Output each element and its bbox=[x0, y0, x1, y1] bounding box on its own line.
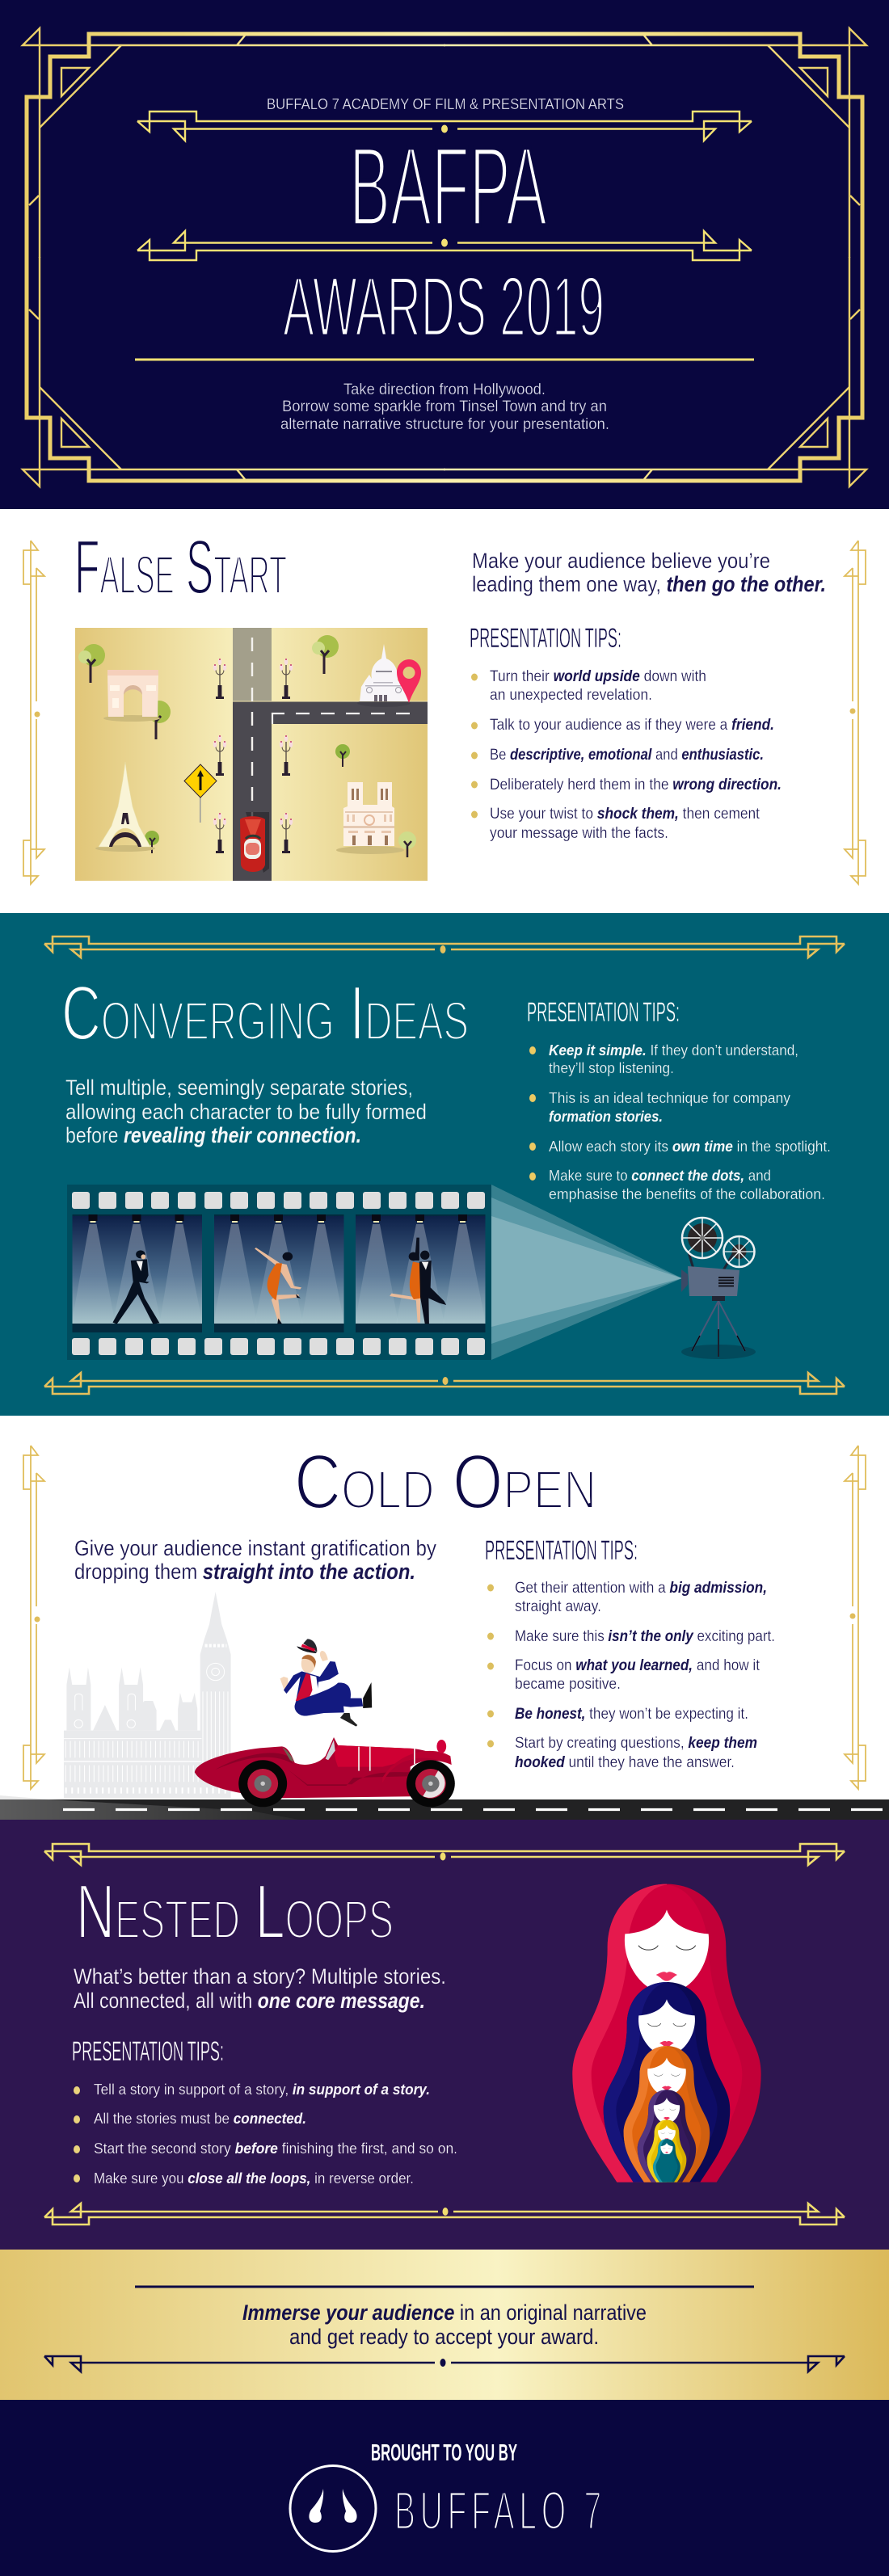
sprocket holes bbox=[72, 1192, 485, 1355]
Arc de Triomphe bbox=[103, 670, 160, 722]
lead text bbox=[74, 1536, 436, 1584]
panel: Converging Ideas bbox=[0, 913, 889, 1416]
Sacre Coeur bbox=[357, 644, 411, 707]
brought to you by: BROUGHT TO YOU BY bbox=[371, 2440, 517, 2466]
map illustration bbox=[75, 628, 428, 881]
location pin bbox=[397, 659, 421, 703]
hat bbox=[297, 1639, 317, 1653]
street lamps bbox=[213, 659, 293, 853]
tips list: an unexpected revelation. bbox=[490, 687, 652, 704]
tips heading: PRESENTATION TIPS: bbox=[470, 623, 621, 654]
lead text bbox=[74, 1964, 446, 2013]
intro text: alternate narrative structure for your presentation. bbox=[280, 416, 609, 433]
tips list: Be descriptive, emotional and enthusiastic. bbox=[490, 747, 764, 764]
panel: footer bbox=[0, 2400, 889, 2576]
Notre Dame bbox=[336, 782, 404, 854]
dancers bbox=[112, 1238, 446, 1324]
panel: header bbox=[0, 0, 889, 509]
lead text: Give your audience instant gratification by bbox=[74, 1536, 436, 1560]
red vintage car bbox=[195, 1737, 455, 1807]
panel: conclusion band bbox=[0, 2250, 889, 2400]
ornament bbox=[44, 2356, 845, 2372]
presentation tips bbox=[72, 2036, 457, 2187]
closing text bbox=[242, 2300, 647, 2349]
couple dancing bbox=[390, 1238, 446, 1324]
film strip bbox=[67, 1185, 491, 1360]
lead text: leading them one way, then go the other. bbox=[472, 572, 826, 596]
lead text: Tell multiple, seemingly separate stories, bbox=[65, 1075, 413, 1100]
tips list: This is an ideal technique for company bbox=[549, 1089, 791, 1106]
Westminster skyline bbox=[64, 1592, 231, 1798]
road bbox=[0, 1795, 889, 1820]
divider bbox=[135, 2285, 754, 2288]
lead text bbox=[472, 549, 826, 596]
tips list: Start by creating questions, keep them bbox=[515, 1735, 757, 1752]
tips list: Keep it simple. If they don’t understand, bbox=[549, 1042, 798, 1059]
lead text: allowing each character to be fully formed bbox=[65, 1100, 427, 1124]
subtitle: Awards 2019: AWARDS 2019 bbox=[283, 260, 605, 354]
tips list: Make sure this isn’t the only exciting part. bbox=[515, 1628, 775, 1645]
Eiffel Tower bbox=[95, 762, 155, 852]
lead text: Make your audience believe you’re bbox=[472, 549, 770, 573]
tips list: Get their attention with a big admission, bbox=[515, 1580, 767, 1597]
tips list bbox=[529, 1042, 831, 1202]
tips list bbox=[74, 2081, 457, 2187]
presentation tips bbox=[485, 1535, 775, 1771]
tips list: Talk to your audience as if they were a friend. bbox=[490, 717, 774, 734]
tips list: became positive. bbox=[515, 1676, 621, 1693]
title: BAFPA: BAFPA bbox=[349, 123, 547, 250]
nesting dolls bbox=[572, 1884, 761, 2182]
lead text: before revealing their connection. bbox=[65, 1123, 361, 1147]
lead text: What’s better than a story? Multiple stories. bbox=[74, 1964, 446, 1989]
presentation tips bbox=[527, 997, 831, 1202]
tips list: formation stories. bbox=[549, 1108, 663, 1125]
heading: False Start bbox=[74, 524, 287, 611]
academy name: BUFFALO 7 ACADEMY OF FILM & PRESENTATION ARTS bbox=[267, 95, 624, 112]
film projector bbox=[681, 1218, 756, 1359]
tips heading: PRESENTATION TIPS: bbox=[72, 2036, 224, 2067]
tips list: Make sure you close all the loops, in reverse order. bbox=[94, 2170, 414, 2187]
closing text: Immerse your audience in an original narrative bbox=[242, 2300, 647, 2325]
tips list: emphasise the benefits of the collaboration. bbox=[549, 1185, 825, 1202]
tips list: Start the second story before finishing the first, and so on. bbox=[94, 2140, 457, 2157]
presentation tips bbox=[470, 623, 782, 842]
tips heading: PRESENTATION TIPS: bbox=[485, 1535, 638, 1566]
man walking bbox=[112, 1250, 159, 1324]
woman dancing bbox=[255, 1248, 301, 1324]
tips list: hooked until they have the answer. bbox=[515, 1754, 735, 1771]
top ornament bbox=[44, 937, 845, 958]
bottom ornament bbox=[44, 1373, 845, 1394]
bottom ornament bbox=[44, 2203, 845, 2225]
tips list: Tell a story in support of a story, in support of a story. bbox=[94, 2081, 430, 2098]
closing text: and get ready to accept your award. bbox=[289, 2325, 599, 2349]
art deco gold frame bbox=[23, 28, 866, 486]
tips list: All the stories must be connected. bbox=[94, 2110, 306, 2127]
tips list: Use your twist to shock them, then cement bbox=[490, 806, 760, 823]
tips list: Turn their world upside down with bbox=[490, 668, 706, 685]
tips list: Deliberately herd them in the wrong direction. bbox=[490, 777, 782, 793]
tips list: they’ll stop listening. bbox=[549, 1059, 674, 1076]
intro text: Borrow some sparkle from Tinsel Town and try an bbox=[282, 398, 607, 415]
tips list: straight away. bbox=[515, 1598, 601, 1615]
panel: False Start bbox=[0, 509, 889, 913]
panel: Cold Open bbox=[0, 1416, 889, 1820]
heading: Nested Loops bbox=[76, 1868, 394, 1955]
lead text bbox=[65, 1075, 427, 1147]
road sign bbox=[184, 764, 217, 823]
intro text: Take direction from Hollywood. bbox=[343, 381, 546, 398]
side ornaments bbox=[23, 541, 866, 884]
bottom ornament bbox=[137, 231, 752, 260]
red car bbox=[240, 812, 269, 873]
projector beam bbox=[491, 1185, 682, 1360]
tips list bbox=[487, 1580, 775, 1771]
heading: Cold Open bbox=[294, 1438, 596, 1526]
stage frames bbox=[73, 1214, 485, 1332]
side ornaments bbox=[23, 1446, 866, 1789]
top ornament bbox=[137, 112, 752, 141]
man leaping bbox=[280, 1639, 372, 1727]
top ornament bbox=[44, 1844, 845, 1865]
heading: Converging Ideas bbox=[61, 970, 469, 1057]
tips list: Be honest, they won’t be expecting it. bbox=[515, 1706, 748, 1723]
gold divider bbox=[135, 359, 754, 360]
lead text: dropping them straight into the action. bbox=[74, 1559, 415, 1584]
logo: buffalo horns bbox=[290, 2466, 376, 2552]
tips list bbox=[471, 668, 782, 842]
tips list: Make sure to connect the dots, and bbox=[549, 1167, 771, 1184]
tips list: Focus on what you learned, and how it bbox=[515, 1657, 760, 1674]
tips list: Allow each story its own time in the spotlight. bbox=[549, 1138, 831, 1155]
tips list: your message with the facts. bbox=[490, 825, 668, 842]
lead text: All connected, all with one core message. bbox=[74, 1989, 425, 2013]
intro text bbox=[280, 381, 609, 433]
tips heading: PRESENTATION TIPS: bbox=[527, 997, 680, 1028]
roads bbox=[233, 628, 428, 881]
wordmark: BUFFALO 7 bbox=[394, 2481, 606, 2541]
panel: Nested Loops bbox=[0, 1820, 889, 2250]
trees bbox=[78, 635, 416, 857]
